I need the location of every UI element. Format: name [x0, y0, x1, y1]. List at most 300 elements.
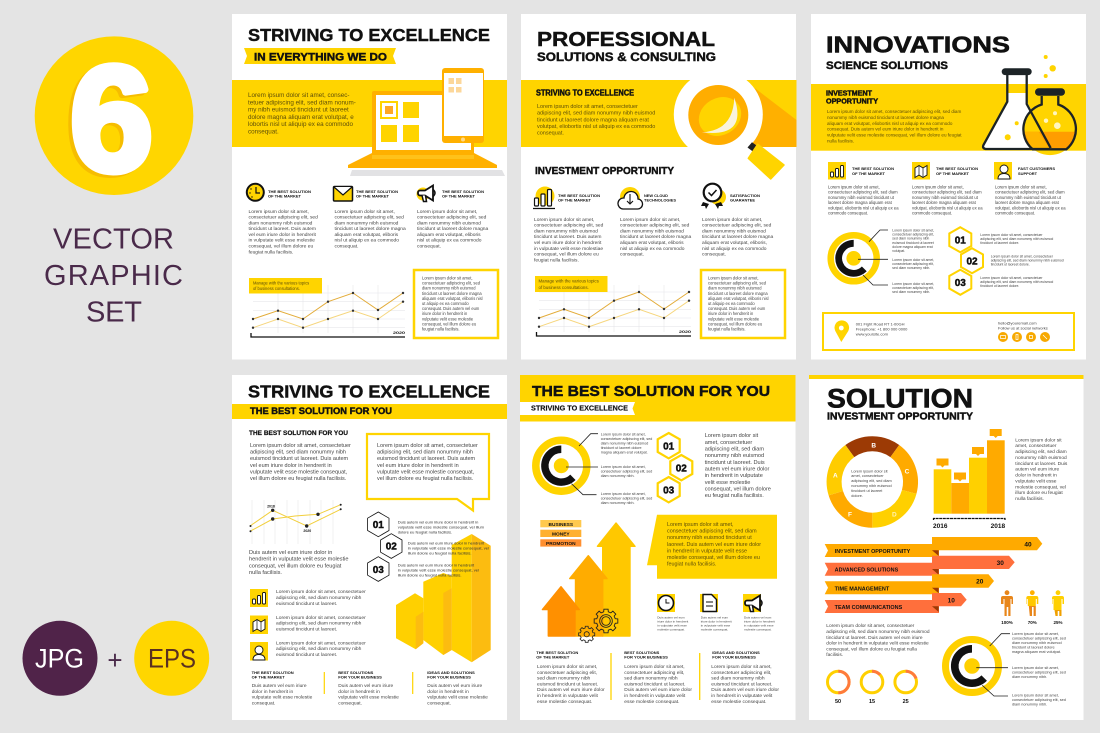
- donut notes: consectetuer adipiscing elit, sed: [601, 496, 652, 500]
- band text: aliquam erat volutpat, eliobortis nisl ut aliquip ex ea commodo: [827, 121, 953, 126]
- bordered text box: vulputate velit esse molestie: [422, 316, 474, 321]
- bar chart text: molestie consequat, vel: [1015, 484, 1066, 490]
- segmented ring chart: dolore.: [851, 494, 863, 498]
- feature text 2: nisl ut aliquip ex ea commodo: [334, 238, 399, 244]
- chart caption: consequat, vel illum dolore eu feugiat: [249, 563, 342, 569]
- band heading: STRIVING TO EXCELLENCE: [536, 89, 635, 98]
- donut notes: Lorem ipsum dolor sit amet,: [1012, 632, 1059, 636]
- feature text 1: consectetuer adipiscing elit, sed: [534, 223, 604, 229]
- line chart: 2018: [267, 504, 275, 508]
- panel: the best solution for you: [520, 375, 796, 720]
- yellow band: [521, 80, 796, 147]
- panel: solution, investment opportunity: [809, 375, 1084, 720]
- feature text 3: nisl ut aliquip ex ea commodo: [702, 246, 767, 252]
- footer column 3: in hendrerit in vulputate velit: [711, 693, 773, 699]
- feature text 3: consectetuer adipiscing elit, sed: [702, 223, 772, 229]
- heading: vector graphic set: VECTOR: [53, 224, 174, 256]
- donut notes: Lorem ipsum dolor sit amet,: [601, 432, 646, 436]
- tags: business, money, promotion: [540, 520, 581, 547]
- footer column 2: BEST SOLUTIONS: [624, 650, 660, 655]
- footer column 2: in hendrerit in vulputate velit: [624, 693, 686, 699]
- heading: vector graphic set: SET: [86, 297, 142, 329]
- icon note 2: euismod tincidunt ut laoreet.: [276, 627, 337, 633]
- bar chart text: nonummy nibh euismod: [1015, 455, 1067, 461]
- footer column 3: consequat.: [427, 700, 451, 706]
- segmented ring chart: tincidunt ut laoreet: [851, 489, 883, 493]
- segmented ring chart: C: [905, 468, 910, 476]
- feature text 3: diam nonummy nibh euismod: [702, 228, 766, 234]
- isometric bars: [396, 534, 491, 662]
- footer column 2: consectetuer adipiscing elit,: [624, 670, 684, 676]
- donut notes: Lorem ipsum dolor sit amet,: [601, 492, 646, 496]
- intro text: vel eum iriure dolor in hendrerit in: [250, 463, 332, 469]
- bordered text box: [414, 270, 498, 338]
- ribbon bars: ADVANCED SOLUTIONS: [835, 568, 899, 574]
- donut notes: sed diam nonummy nibh: [892, 237, 929, 241]
- intro text: amet, consectetuer: [705, 440, 752, 446]
- footer column 3: IDEAS AND SOLUTIONS: [427, 670, 475, 675]
- icon note 2: Duis autem vel eum: [701, 615, 728, 619]
- band text: nonummy nibh euismod tincidunt ut laoreet dolore magna: [827, 115, 944, 120]
- line chart: [536, 285, 692, 336]
- step notes: Lorem ipsum dolor sit amet, consectetuer: [991, 254, 1054, 258]
- bar chart text: amet, consectetuer: [1015, 443, 1057, 449]
- small progress rings: [828, 671, 916, 705]
- donut notes: diam nonummy nibh.: [601, 474, 634, 478]
- feature text 3: consequat.: [417, 243, 441, 249]
- footer column 3: [711, 650, 779, 705]
- footer column 1: Duis autem vel eum iriure: [252, 683, 307, 689]
- band text: adipiscing elit, sed diam nonummy nibh euismod: [537, 111, 655, 117]
- bordered text box: iriure dolor in hendrerit in: [708, 311, 754, 316]
- footer column 2: FOR YOUR BUSINESS: [624, 655, 668, 660]
- bordered text box: consequat, vel illum dolore eu: [422, 321, 476, 326]
- feature label 2: OF THE MARKET: [356, 194, 390, 198]
- yellow callout: in hendrerit in vulputate velit esse: [667, 548, 747, 554]
- icon note 2: Lorem ipsum dolor sit amet, consectetuer: [276, 615, 366, 621]
- feature text 3: tincidunt ut laoreet dolore magna: [702, 234, 774, 240]
- format badges: JPG + EPS: JPG: [35, 644, 84, 674]
- speech box: vulputate velit esse molestie consequat,: [377, 469, 475, 475]
- feature text 3: commodo consequat.: [995, 210, 1035, 216]
- feature label 3: OF THE MARKET: [442, 194, 476, 198]
- feature text 1: feugiat nulla facilisis.: [248, 249, 293, 255]
- ribbon subtitle: [520, 402, 635, 415]
- feature text 3: laoreet dolore magna aliquam erat: [995, 200, 1060, 205]
- bordered text box: feugiat nulla facilisis.: [422, 326, 460, 332]
- feature label 1: THE BEST SOLUTION: [852, 166, 894, 171]
- segmented ring chart: amet, consectetuer: [851, 474, 884, 478]
- ribbon subtitle: STRIVING TO EXCELLENCE: [531, 405, 628, 412]
- title: STRIVING TO EXCELLENCE: [248, 382, 490, 402]
- footer column 1: consectetuer adipiscing elit,: [537, 670, 597, 676]
- footer column 3: esse molestie consequat.: [711, 699, 766, 705]
- icon: customer support square: [994, 162, 1012, 180]
- footer column 1: THE BEST SOLUTION: [252, 670, 294, 675]
- line chart: [251, 285, 406, 337]
- numbered steps: 02: [966, 256, 978, 268]
- footer column 2: consequat.: [338, 700, 362, 706]
- ribbon bars: 20: [976, 579, 984, 586]
- icon: megaphone square: [743, 594, 762, 612]
- band text: Lorem ipsum dolor sit amet, consectetuer: [537, 104, 638, 110]
- intro text: autem vel eum iriure dolor: [705, 467, 770, 473]
- growth arrows: [542, 523, 635, 636]
- ribbon bars: 40: [1024, 541, 1032, 548]
- chart tag: [535, 276, 608, 292]
- feature text 1: vel eum iriure dolor in hendrerit: [248, 232, 317, 238]
- yellow subtitle band: THE BEST SOLUTION FOR YOU: [250, 406, 392, 417]
- small progress rings: 15: [869, 699, 875, 705]
- step notes: in vulputate velit esse molestie consequat, vel: [398, 567, 479, 572]
- feature text 3: consequat.: [702, 252, 726, 258]
- bordered text box: iriure dolor in hendrerit in: [422, 311, 468, 316]
- feature text 1: tincidunt ut laoreet. Duis autem: [534, 234, 601, 240]
- intro text: in hendrerit in vulputate: [705, 473, 763, 479]
- donut chart with leaders: [831, 230, 888, 285]
- icon: map pin: [834, 320, 849, 342]
- badge: number six: 6: [70, 34, 153, 202]
- donut notes: diam nonummy nibh.: [1012, 702, 1047, 706]
- step notes: tincidunt ut laoreet dolore.: [980, 241, 1019, 245]
- step notes: Lorem ipsum dolor sit amet, consectetuer: [980, 233, 1043, 237]
- icon: gears: [579, 609, 618, 642]
- bordered text box: consectetuer adipiscing elit, sed: [422, 281, 481, 286]
- yellow callout: consectetuer adipiscing elit, sed diam: [667, 529, 757, 535]
- segmented ring chart: adipiscing elit, sed diam: [851, 479, 892, 483]
- feature text 1: in vulputate velit esse molestie: [248, 238, 315, 244]
- feature label 1: THE BEST SOLUTION: [558, 193, 600, 198]
- lens shadow: [730, 88, 796, 147]
- footer column 1: [252, 670, 313, 706]
- icon: bars: [533, 186, 555, 208]
- numbered steps: 03: [955, 278, 966, 289]
- icon: laptop and tablet: [348, 68, 505, 176]
- tags: business, money, promotion: MONEY: [552, 532, 570, 538]
- bordered text box: consequat, vel illum dolore eu: [708, 321, 762, 326]
- feature label 3: SATISFACTION: [730, 193, 760, 198]
- feature text 3: diam nonummy nibh euismod: [417, 220, 481, 226]
- ribbon bars: TIME MANAGEMENT: [835, 586, 890, 592]
- step notes: in vulputate velit esse molestie consequat, vel: [408, 545, 489, 550]
- feature label 1: OF THE MARKET: [268, 194, 302, 198]
- address: 001 Fight Road RT 1-00GH: [856, 322, 905, 326]
- feature text 3: Lorem ipsum dolor sit amet,: [417, 209, 477, 215]
- footer column 1: euismod tincidunt ut laoreet.: [537, 681, 598, 687]
- feature text 2: aliquam erat volutpat, eliboris: [334, 232, 399, 238]
- donut notes: volutpat.: [892, 249, 905, 253]
- feature text 2: aliquam erat volutpat, eliboris: [620, 240, 684, 246]
- footer column 2: Lorem ipsum dolor sit amet,: [624, 664, 685, 670]
- yellow callout: Lorem ipsum dolor sit amet,: [667, 522, 734, 528]
- feature text 1: commodo consequat.: [828, 210, 868, 216]
- icon: document square: [700, 594, 718, 612]
- footer column 1: Lorem ipsum dolor sit amet,: [537, 664, 597, 670]
- feature text 1: diam nonummy nibh euismod: [248, 220, 313, 226]
- feature text 2: consectetuer adipiscing elit, sed diam: [912, 190, 982, 195]
- feature text 1: feugiat nulla facilisis.: [534, 257, 579, 263]
- footer column 2: vulputate velit esse molestie: [338, 695, 399, 701]
- bar chart text: dolor in hendrerit in: [1015, 473, 1057, 479]
- title: STRIVING TO EXCELLENCE: [248, 25, 490, 45]
- icon: bars square: [250, 589, 268, 607]
- bordered text box: Lorem ipsum dolor sit amet,: [422, 276, 473, 280]
- icon: flasks: [983, 55, 1076, 155]
- icon: magnifying glass: [674, 70, 784, 179]
- numbered steps: 01: [955, 236, 966, 246]
- band text: vulputate velit esse molestie consequat, vel illum dolore eu feugiat: [827, 133, 962, 138]
- footer column 3: euismod tincidunt ut laoreet.: [711, 681, 772, 687]
- feature text 2: nonummy nibh euismod tincidunt ut: [912, 195, 979, 200]
- bordered text box: feugiat nulla facilisis.: [708, 326, 746, 332]
- icon: customer support square: [250, 642, 268, 660]
- line chart: 2020: [679, 329, 692, 334]
- footer column 1: esse molestie consequat.: [537, 699, 592, 705]
- address: www.yoursite.com: [856, 332, 889, 336]
- donut chart with leaders: [946, 634, 1010, 696]
- band text: dolore magna aliquam erat volutpat, e: [248, 114, 354, 121]
- bar chart text: Lorem ipsum dolor sit: [1015, 437, 1062, 443]
- email and social: Follow us at social networks: [998, 326, 1048, 331]
- feature text 2: Lorem ipsum dolor sit amet,: [334, 209, 395, 215]
- icon: clock square: [657, 594, 675, 612]
- footer column 1: dolor in hendrerit in: [252, 689, 293, 695]
- donut notes: Lorem ipsum dolor sit amet,: [892, 258, 934, 262]
- feature label 2: THE BEST SOLUTION: [356, 189, 398, 194]
- yellow callout: nonummy nibh euismod tincidunt ut: [667, 535, 752, 541]
- band text: consequat.: [248, 128, 279, 136]
- intro text: velit esse molestie: [705, 480, 750, 486]
- bordered text box: aliquam erat volutpat, eliboris nisl: [708, 296, 769, 301]
- footer column 1: vulputate velit esse molestie: [252, 695, 313, 701]
- bordered text box: vulputate velit esse molestie: [708, 316, 760, 321]
- feature label 3: GUARANTEE: [730, 198, 755, 202]
- bordered text box: consequat. Duis autem vel eum: [422, 306, 480, 311]
- speech box: [367, 434, 489, 510]
- body text: tincidunt ut laoreet. Duis autem vel eum iriure: [826, 635, 923, 641]
- footer column 3: Lorem ipsum dolor sit amet,: [711, 664, 772, 670]
- icon: envelope: [334, 186, 352, 201]
- donut notes: diam nonummy nibh.: [601, 501, 634, 505]
- heading: vector graphic set: [44, 224, 183, 329]
- feature text 2: consectetuer adipiscing elit, sed: [334, 215, 404, 221]
- small progress rings: 25: [903, 699, 909, 705]
- segmented ring chart: Lorem ipsum dolor sit: [851, 469, 889, 473]
- bordered text box: consectetuer adipiscing elit, sed: [708, 281, 767, 286]
- segmented ring chart: A: [833, 472, 838, 480]
- bordered text box: ut aliquip ex ea commodo: [708, 301, 755, 306]
- numbered steps: [658, 433, 692, 502]
- format badges: JPG + EPS: EPS: [148, 644, 196, 674]
- yellow subtitle band: [232, 404, 507, 419]
- donut notes: Lorem ipsum dolor sit amet,: [892, 282, 934, 286]
- donut notes: consectetuer adipiscing elit,: [892, 286, 934, 290]
- donut notes: consectetuer adipiscing elit,: [892, 262, 934, 266]
- intro text: vulputate velit esse molestie consequat,: [250, 469, 348, 475]
- feature text 2: consequat.: [620, 252, 644, 258]
- step notes: Duis autem vel eum iriure dolor in hendrerit in: [398, 520, 478, 524]
- bar chart: 2018: [991, 524, 1006, 530]
- footer column 3: vulputate velit esse molestie: [427, 695, 488, 701]
- feature label 3: THE BEST SOLUTION: [442, 189, 484, 194]
- bordered text box: tincidunt ut laoreet dolore magna: [422, 291, 482, 296]
- intro text: adipiscing elit, sed diam nonummy nibh: [250, 450, 346, 456]
- body text: dolor in hendrerit in vulputate velit esse molestie: [826, 641, 929, 647]
- feature text 3: nonummy nibh euismod tincidunt ut: [995, 195, 1062, 200]
- small progress rings: 50: [835, 699, 841, 705]
- feature text 2: laoreet dolore magna aliquam erat: [912, 200, 977, 205]
- feature text 2: commodo consequat.: [912, 210, 952, 216]
- step notes: tincidunt ut laoreet dolore.: [991, 263, 1030, 267]
- numbered steps: [368, 512, 402, 581]
- people percentages: 100%: [1001, 620, 1013, 625]
- feature label 1: OF THE MARKET: [852, 171, 886, 176]
- body text: adipiscing elit, sed diam nonummy nibh euismod: [826, 629, 930, 635]
- badge: number six: [35, 34, 193, 205]
- bordered text box: [701, 270, 785, 338]
- feature text 2: diam nonummy nibh euismod: [334, 220, 399, 226]
- feature text 2: tincidunt ut laoreet dolore magna: [334, 226, 406, 232]
- subtitle: SCIENCE SOLUTIONS: [826, 60, 948, 72]
- donut notes: consectetuer adipiscing elit, sed: [601, 470, 652, 474]
- footer column 1: Duis autem vel eum iriure dolor: [537, 687, 605, 693]
- bar chart text: nulla facilisis.: [1015, 496, 1044, 502]
- tags: business, money, promotion: PROMOTION: [546, 541, 576, 547]
- segmented ring chart: [833, 442, 911, 520]
- ribbon bars: [825, 537, 1042, 613]
- footer column 1: THE BEST SOLUTION: [536, 650, 578, 655]
- speech box: vel illum dolore eu feugiat nulla facilisis.: [377, 476, 474, 482]
- subtitle: INVESTMENT OPPORTUNITY: [827, 412, 973, 423]
- bar chart: 2016: [933, 524, 948, 530]
- intro text: Lorem ipsum dolor sit amet, consectetuer: [250, 443, 351, 449]
- bar chart: [933, 429, 1006, 530]
- footer column 3: Duis autem vel eum iriure dolor: [711, 687, 779, 693]
- footer column 1: consequat.: [252, 700, 275, 706]
- ribbon bars: TEAM COMMUNICATIONS: [835, 605, 903, 611]
- body text: facilisis.: [826, 652, 843, 658]
- feature text 3: tincidunt ut laoreet dolore magna: [417, 226, 489, 232]
- feature label 2: OF THE MARKET: [936, 171, 970, 176]
- speech box: adipiscing elit, sed diam nonummy nibh: [377, 450, 473, 456]
- donut notes: consectetuer adipiscing elit, sed: [601, 437, 652, 441]
- icon: bars square: [828, 162, 846, 180]
- band text: consequat.: [537, 131, 564, 137]
- segmented ring chart: F: [848, 512, 852, 518]
- donut notes: diam nonummy nibh.: [1012, 675, 1047, 679]
- bar chart text: vulputate velit esse: [1015, 478, 1057, 484]
- numbered steps: 01: [373, 520, 384, 531]
- footer column 2: esse molestie consequat.: [624, 699, 679, 705]
- band text: tetuer adipiscing elit, sed diam nonum-: [248, 99, 356, 106]
- icon note 1: iriure dolor in hendrerit: [657, 619, 688, 623]
- icon note 2: molestie consequat.: [701, 627, 728, 631]
- band text: volutpat, eliobortis nisl ut aliquip ex ea commodo: [537, 124, 655, 130]
- heading: vector graphic set: GRAPHIC: [44, 260, 183, 292]
- icon: clock: [247, 184, 264, 201]
- footer column 3: Duis autem vel eum iriure: [427, 683, 483, 689]
- section heading: INVESTMENT OPPORTUNITY: [535, 165, 674, 177]
- format badges: JPG + EPS: +: [107, 645, 123, 675]
- icon note 2: adipiscing elit, sed diam nonummy nibh: [276, 621, 362, 627]
- icon note 1: Lorem ipsum dolor sit amet, consectetuer: [276, 589, 366, 595]
- feature text 1: volutpat. eliobortis nisl ut aliquip ex ea: [828, 205, 899, 210]
- feature text 2: tincidunt ut laoreet dolore magna: [620, 234, 692, 240]
- footer column 2: [338, 670, 399, 706]
- title: THE BEST SOLUTION FOR YOU: [532, 384, 770, 400]
- step notes: Duis autem vel eum iriure dolor in hendrerit: [408, 540, 485, 546]
- feature text 1: Lorem ipsum dolor sit amet,: [828, 184, 880, 190]
- footer column 1: [536, 650, 605, 705]
- yellow band: [232, 80, 507, 147]
- feature text 1: consectetuer adipiscing elit, sed diam: [828, 190, 898, 195]
- donut notes: Lorem ipsum dolor sit amet,: [1012, 666, 1059, 670]
- donut notes: magna aliquam erat volutpat.: [1012, 650, 1061, 654]
- title: PROFESSIONAL: [537, 29, 715, 51]
- icon note 3: Duis autem vel eum: [744, 615, 772, 619]
- step notes: Lorem ipsum dolor sit amet, consectetuer: [980, 276, 1043, 280]
- intro text: nonummy nibh euismod: [705, 453, 764, 459]
- feature label 1: OF THE MARKET: [558, 198, 592, 202]
- donut notes: magna aliquam erat volutpat.: [601, 450, 648, 454]
- feature text 2: Lorem ipsum dolor sit amet,: [620, 217, 680, 223]
- step notes: illum dolore eu feugiat nulla facilisis.: [408, 550, 472, 555]
- bar chart text: adipiscing elit, sed diam: [1015, 449, 1067, 455]
- footer column 2: euismod tincidunt ut laoreet.: [624, 681, 685, 687]
- footer column 3: consectetuer adipiscing elit,: [711, 670, 771, 676]
- icon note 3: adipiscing elit, sed diam nonummy nibh: [276, 646, 362, 652]
- step notes: illum dolore eu feugiat nulla facilisis.: [398, 572, 462, 577]
- badge: number six: 6: [66, 37, 150, 205]
- icon note 1: molestie consequat.: [657, 627, 685, 631]
- donut notes: sed diam nonummy nibh.: [892, 266, 930, 270]
- ribbon subtitle: [244, 48, 396, 64]
- band text: lobortis nisl ut aliquip ex ea commodo: [248, 121, 354, 128]
- yellow callout: feugiat nulla facilisis.: [667, 562, 716, 568]
- footer column 3: sed diam nonummy nibh: [711, 676, 765, 682]
- feature text 1: vel eum iriure dolor in hendrerit: [534, 240, 602, 246]
- title: INNOVATIONS: [826, 32, 1010, 58]
- email and social: hello@youremail.com: [998, 320, 1037, 326]
- icon note 3: iriure dolor in hendrerit: [744, 619, 775, 623]
- ribbon bars: 10: [948, 597, 955, 604]
- icon note 1: adipiscing elit, sed diam nonummy nibh: [276, 595, 362, 601]
- intro text: tincidunt ut laoreet. Duis: [705, 460, 765, 466]
- numbered steps: 03: [373, 565, 384, 576]
- bordered text box: Lorem ipsum dolor sit amet,: [708, 276, 759, 280]
- donut notes: tincidunt ut laoreet dolore: [1012, 646, 1055, 650]
- top yellow bar: [809, 375, 1084, 379]
- donut notes: consectetuer adipiscing elit,: [892, 233, 934, 237]
- bar chart text: tincidunt ut laoreet. Duis: [1015, 461, 1068, 467]
- bordered text box: diam nonummy nibh euismod: [422, 286, 476, 291]
- body text: Lorem ipsum dolor sit amet, consectetuer: [826, 623, 915, 629]
- feature label 2: THE BEST SOLUTION: [936, 166, 978, 171]
- bordered text box: diam nonummy nibh euismod: [708, 286, 762, 291]
- panel: innovations science solutions: [811, 14, 1086, 360]
- social icons: [998, 332, 1050, 342]
- intro text: vel illum dolore eu feugiat nulla facilisis.: [250, 476, 347, 482]
- intro text: euismod tincidunt ut laoreet. Duis autem: [250, 456, 349, 462]
- chart tag: of business consultations.: [538, 285, 589, 290]
- feature text 2: volutpat. eliobortis nisl ut aliquip ex ea: [912, 205, 983, 210]
- ribbon bars: 30: [997, 560, 1004, 567]
- footer column 3: FOR YOUR BUSINESS: [712, 655, 756, 660]
- footer column 2: [624, 650, 692, 705]
- bar chart text: autem vel eum iriure: [1015, 467, 1059, 473]
- footer column 1: OF THE MARKET: [536, 655, 570, 660]
- speech box: Lorem ipsum dolor sit amet, consectetuer: [377, 443, 478, 449]
